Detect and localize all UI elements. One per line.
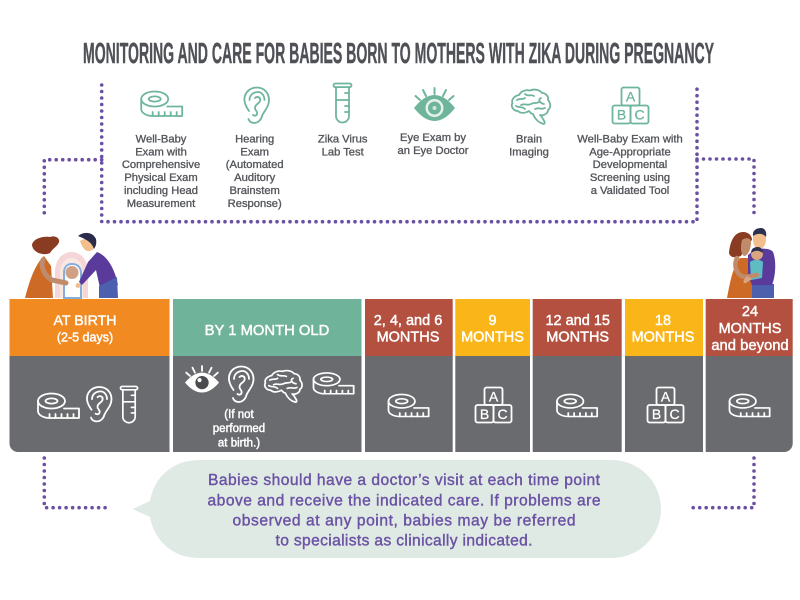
caption: brain imaging — [509, 134, 549, 158]
caption: developmental screening: Well-Baby Exam with — [577, 134, 683, 146]
panel: at birth — [10, 299, 170, 452]
panel: 12 and 15 months — [533, 299, 622, 452]
caption: developmental screening: Screening using — [590, 172, 670, 184]
caption: hearing exam: Response) — [228, 198, 282, 210]
caption: eye exam — [398, 132, 469, 157]
panel: 9 months: A — [489, 388, 499, 404]
icon: eye — [414, 88, 455, 121]
caption: well-baby exam: Physical Exam — [124, 172, 198, 184]
caption: developmental screening: Developmental — [593, 159, 667, 171]
caption: well-baby exam: including Head — [124, 185, 198, 197]
panel: by 1 month old: performed — [213, 423, 265, 435]
panel: 18 months: MONTHS — [632, 330, 694, 346]
callout: doctor's visit note: above and receive the indicated care. If problems are — [208, 492, 600, 510]
panel: 2, 4, and 6 months — [365, 299, 453, 452]
panel: 2, 4, and 6 months: 2, 4, and 6 — [374, 313, 442, 329]
icon: ABC blocks: A — [626, 88, 636, 104]
panel: 24 months and beyond: 24 — [742, 304, 758, 320]
caption: developmental screening: Age-Appropriate — [589, 146, 671, 158]
panel: 12 and 15 months: 12 and 15 — [545, 313, 610, 329]
panel: 2, 4, and 6 months: MONTHS — [377, 330, 439, 346]
panel: at birth: AT BIRTH — [53, 313, 117, 329]
callout: doctor's visit note: Babies should have a doctor’s visit at each time point — [208, 472, 601, 489]
panel: by 1 month old: (If not — [224, 409, 255, 421]
caption: developmental screening: a Validated Tool — [591, 185, 669, 197]
caption: eye exam: Eye Exam by — [400, 132, 466, 144]
panel: 12 and 15 months: MONTHS — [546, 330, 609, 346]
icon: ABC blocks: B — [617, 106, 626, 122]
callout: doctor's visit note: to specialists as clinically indicated. — [276, 532, 532, 550]
panel: 9 months: 9 — [488, 313, 497, 329]
caption: hearing exam: Brainstem — [230, 185, 280, 197]
panel: 24 months and beyond: and beyond — [711, 338, 789, 354]
panel: 18 months: C — [669, 406, 680, 422]
caption: hearing exam: Exam — [240, 146, 269, 158]
icon: tape measure — [141, 92, 182, 116]
icon: test tube — [334, 84, 352, 122]
icon: brain — [512, 90, 550, 124]
caption: hearing exam: Hearing — [235, 134, 274, 146]
panel: 24 months and beyond: MONTHS — [719, 321, 781, 337]
panel: 9 months: MONTHS — [461, 330, 524, 346]
panel: by 1 month old: at birth.) — [218, 438, 260, 450]
panel: by 1 month old: BY 1 MONTH OLD — [205, 323, 329, 339]
panel: by 1 month old — [173, 299, 362, 452]
dotted bracket: care key — [44, 85, 754, 222]
illustration: family with toddler — [727, 228, 775, 298]
panel: 9 months: B — [480, 406, 489, 422]
dotted connectors: bottom — [44, 458, 754, 508]
panel: 18 months: B — [652, 406, 661, 422]
callout: doctor's visit note — [133, 460, 661, 558]
caption: developmental screening — [577, 134, 683, 197]
panel: 9 months — [455, 299, 530, 452]
caption: eye exam: an Eye Doctor — [398, 145, 469, 157]
icon: ABC blocks: C — [634, 106, 645, 122]
caption: well-baby exam: Well-Baby — [136, 134, 187, 146]
caption: brain imaging: Imaging — [509, 146, 549, 158]
caption: lab test: Lab Test — [322, 146, 365, 158]
icon: ear — [244, 88, 269, 123]
caption: well-baby exam — [122, 134, 200, 210]
caption: well-baby exam: Measurement — [127, 198, 196, 210]
caption: lab test — [318, 134, 368, 158]
panel: 9 months: C — [497, 406, 508, 422]
panel: 18 months: A — [661, 388, 671, 404]
callout: doctor's visit note: observed at any point, babies may be referred — [232, 512, 576, 530]
panel: 24 months and beyond — [706, 299, 793, 452]
caption: lab test: Zika Virus — [318, 134, 368, 146]
caption: well-baby exam: Exam with — [135, 146, 187, 158]
caption: hearing exam — [226, 134, 284, 210]
caption: brain imaging: Brain — [516, 134, 542, 146]
icon: ABC blocks — [612, 88, 648, 124]
panel: 18 months: 18 — [655, 313, 671, 329]
caption: hearing exam: Auditory — [234, 172, 276, 184]
panel: at birth: (2-5 days) — [57, 330, 113, 344]
caption: hearing exam: (Automated — [226, 159, 284, 171]
panel: 18 months — [625, 299, 703, 452]
caption: well-baby exam: Comprehensive — [122, 159, 200, 171]
illustration: parents with newborn — [25, 233, 118, 298]
